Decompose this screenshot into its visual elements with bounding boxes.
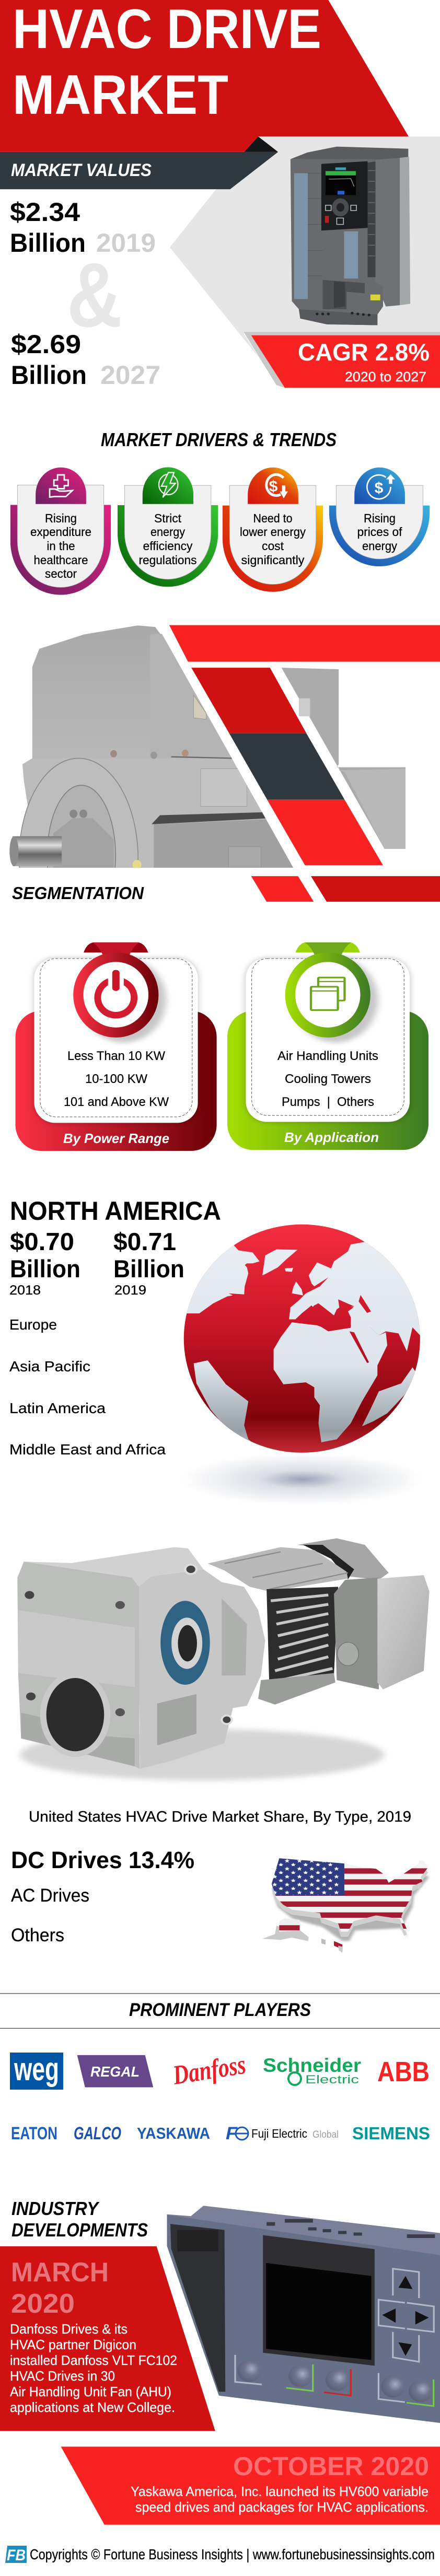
junction box [334,1578,379,1689]
grey chevron backdrop [170,136,440,358]
logo: fuji electric: F [226,2124,238,2143]
driver card: energy prices: energy [362,539,397,553]
development: march 2020: Danfoss Drives & its [10,2321,128,2337]
heading: industry developments: DEVELOPMENTS [11,2219,148,2241]
logo: danfoss: Danfoss [170,2050,248,2091]
direction keys [378,2269,434,2362]
heading: prominent players: PROMINENT PLAYERS [129,2000,311,2020]
control panel photo [167,2206,440,2423]
region list [9,1316,166,1458]
development: october 2020: speed drives and packages for HVAC applications. [135,2499,429,2515]
dark fold triangle [244,136,278,152]
value 2019 [10,197,156,258]
segment card: by application [227,942,429,1150]
logo: eaton: EATON [11,2124,57,2143]
icon: us flag map [262,1856,432,1953]
driver card: regulations: efficiency [143,539,193,553]
red title banner [0,0,409,152]
value 2019 [113,1228,184,1298]
us share list: Others [11,1925,64,1945]
driver card: regulations: energy [150,525,185,539]
market values banner [0,152,278,189]
segment card: by power range [16,942,217,1151]
heading: industry developments [11,2198,148,2241]
chart title: us market share: United States HVAC Drive Market Share, By Type, 2019 [29,1809,411,1825]
value 2027 [11,330,160,390]
icon: hand with cross [50,475,73,497]
globe illustration [182,1225,426,1505]
product image: HVAC drive unit [291,147,410,325]
segment card: by application: Air Handling Units [277,1049,378,1063]
value 2018: Billion [10,1255,80,1283]
driver card: regulations: Strict [154,511,182,525]
electric motor [9,625,406,902]
value 2018: 2018 [9,1283,41,1298]
region list: Asia Pacific [9,1358,90,1374]
development: march 2020: HVAC Drives in 30 [10,2368,115,2384]
blue bearing ring [160,1601,210,1685]
CAGR callout [244,332,440,388]
heading: segmentation: SEGMENTATION [12,883,144,903]
logo: weg: weg [14,2052,59,2088]
development: october 2020 [61,2446,440,2525]
driver card: energy cost: lower energy [240,525,306,539]
development: march 2020 [0,2246,215,2431]
icon: dollar down [267,474,288,498]
seas on the globe [293,1295,371,1363]
icon: lightning bolt [159,472,178,497]
driver card: energy cost: Need to [253,511,293,525]
value 2019: $2.34 [10,197,80,227]
header band: title and market values [0,0,440,358]
development: march 2020: installed Danfoss VLT FC102 [10,2352,177,2368]
icon: application windows [311,977,344,1010]
motor top [207,1547,348,1591]
us share list [11,1847,194,1945]
fins [267,1587,338,1689]
driver card: healthcare: sector [45,567,77,580]
driver card: energy cost: significantly [241,553,305,567]
icon: dollar up: $ [375,480,384,497]
icon: dollar up [367,474,395,499]
fan cover [297,1538,389,1580]
motor photo with diagonal panels [9,625,440,868]
region list: Middle East and Africa [9,1441,166,1458]
icon: fortune business insights logo: FB [7,2547,26,2564]
development: october 2020: Yaskawa America, Inc. launched its HV600 variable [131,2484,429,2499]
segment card: by power range: By Power Range [63,1130,169,1146]
heading: market values: MARKET VALUES [11,160,152,180]
value 2019: Billion [10,228,86,258]
CAGR callout: CAGR 2.8% [298,339,430,366]
heading: market drivers and trends: MARKET DRIVERS & TRENDS [101,429,337,450]
driver card: healthcare [10,468,111,595]
segmentation red accents [251,876,440,902]
segment card: by power range: 10-100 KW [85,1072,147,1086]
driver card: healthcare: healthcare [33,553,88,567]
driver card: healthcare: Rising [45,511,77,525]
logo: schneider electric: Electric [305,2073,359,2086]
logo: fuji electric [226,2124,339,2143]
value 2027: $2.69 [11,330,81,359]
us share list: AC Drives [11,1885,89,1906]
bright red panel [267,800,383,865]
alaska and hawaii [262,1918,343,1953]
development: march 2020: MARCH [11,2257,109,2288]
driver card: regulations [118,467,218,587]
driver card: energy cost: cost [262,539,284,553]
title [13,0,321,126]
top clips [267,2219,435,2238]
segment card: by application: Pumps | Others [282,1095,374,1109]
segment card: by application: By Application [284,1129,379,1145]
icon: dollar down: $ [269,478,278,495]
medallion [73,942,166,1043]
value 2027: Billion [11,360,87,390]
driver card: energy prices: prices of [357,525,402,539]
value 2027: 2027 [100,360,160,390]
icon: power button [94,970,137,1019]
logo: fuji electric: Global [312,2129,339,2140]
logo: galco: GALCO [74,2124,121,2143]
logo: siemens: SIEMENS [352,2124,430,2143]
value 2019: $0.71 [113,1228,176,1255]
segment card: by application: Cooling Towers [285,1072,371,1086]
development: march 2020: applications at New College. [10,2399,175,2415]
value 2019: Billion [113,1255,184,1283]
title: MARKET [13,63,228,126]
driver card: healthcare: in the [47,539,75,553]
driver card: energy prices [329,468,430,566]
driver card: healthcare: expenditure [30,525,91,539]
medallion [285,942,378,1043]
regional heading: north america: NORTH AMERICA [10,1196,221,1226]
dark red panel [191,668,306,733]
segment card: by power range: 101 and Above KW [64,1095,169,1109]
driver card: energy cost [223,468,323,592]
logo: schneider electric [263,2055,361,2086]
gearbox housing [137,1569,265,1769]
value 2018 [9,1228,80,1298]
gearbox front [17,1561,140,1769]
logo: yaskawa: YASKAWA [137,2124,210,2142]
development: march 2020: HVAC partner Digicon [10,2337,136,2352]
logo: regal [77,2055,153,2088]
heading: industry developments: INDUSTRY [11,2198,100,2219]
value 2019: 2019 [114,1283,146,1298]
red top bar [169,625,440,662]
logo: regal: REGAL [90,2064,140,2080]
ampersand: & [67,244,122,346]
region list: Europe [9,1316,57,1333]
CAGR callout: 2020 to 2027 [345,369,426,384]
driver card: energy prices: Rising [364,511,396,525]
segment card: by power range: Less Than 10 KW [67,1049,165,1063]
development: march 2020: Air Handling Unit Fan (AHU) [10,2384,171,2399]
logo: abb: ABB [377,2056,430,2088]
us share list: DC Drives 13.4% [11,1847,194,1873]
development: march 2020: 2020 [11,2289,75,2319]
logo: schneider electric: Schneider [263,2055,361,2076]
logo: weg [10,2052,63,2090]
value 2018: $0.70 [10,1228,74,1255]
value 2019: 2019 [96,228,156,258]
charcoal panel [229,733,344,800]
gear motor photo [17,1538,430,1780]
logo: fuji electric: Fuji Electric [251,2127,307,2140]
divider rules [0,1993,440,1994]
driver card: regulations: regulations [139,553,196,567]
round buttons [237,2360,432,2402]
region list: Latin America [9,1400,106,1416]
development: october 2020: OCTOBER 2020 [233,2452,429,2481]
